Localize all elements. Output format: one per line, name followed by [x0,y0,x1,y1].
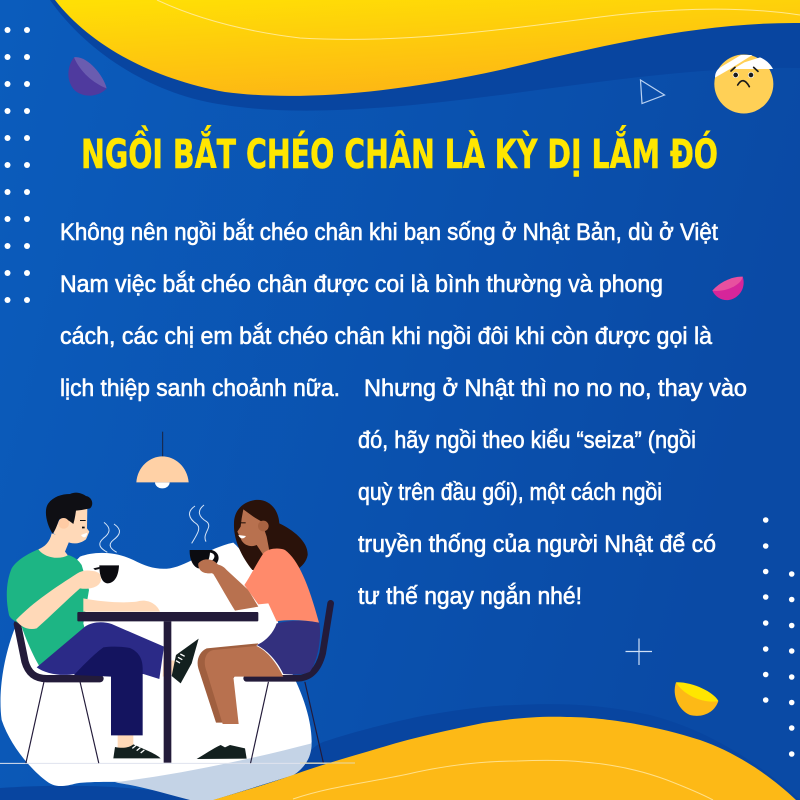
standing shoe [113,744,161,758]
shirt [7,549,89,667]
bottom wave highlight line [293,760,713,800]
face and neck [237,509,269,555]
dots left [4,27,30,303]
hand over cup [80,571,100,588]
woman [190,500,320,759]
thigh [37,622,164,679]
body text: quỳ trên đầu gối), một cách ngồi [358,479,662,506]
shoe stripes [132,745,144,753]
smile [238,535,246,538]
body text: Nam việc bắt chéo chân được coi là bình thường và phong [60,271,663,298]
top wave highlight line [157,0,800,39]
body text: tư thế ngay ngắn nhé! [358,583,582,610]
table [77,612,258,763]
bandage strip across [733,57,773,69]
blob shadow [115,743,312,800]
neck [38,533,70,558]
top yellow wave [55,0,800,96]
bottom left dark band [0,786,213,800]
arm [16,571,101,629]
cup [190,550,219,568]
hand [198,559,219,573]
right eye [748,72,754,78]
raised shoe [172,639,199,683]
floor line overlap [300,762,355,764]
eye [241,521,246,524]
skirt [257,621,320,675]
cup [93,565,119,583]
icon: pink bowl [712,277,744,300]
ear [258,521,269,531]
ear [58,518,69,529]
body text: đó, hãy ngồi theo kiểu “seiza” (ngồi [358,427,696,454]
body text: Không nên ngồi bắt chéo chân khi bạn sống ở Nhật Bản, dù ở Việt [60,219,718,246]
near leg [205,646,283,724]
dots right [763,517,794,757]
steam right [190,505,209,543]
pendant lamp [136,432,189,488]
forearm [203,564,258,611]
body text: truyền thống của người Nhật để có [358,531,716,558]
icon: purple bowl [68,57,107,96]
white blob backdrop [0,543,312,800]
bottom yellow wave [213,717,796,800]
top dark wave [50,0,800,111]
face [53,507,89,543]
bottom dark wave [293,704,800,800]
bandage strip rising [715,55,752,78]
icon: triangle outline [640,80,664,104]
smile [81,533,87,537]
shoe [197,745,247,759]
near forearm on table [83,598,160,612]
man [7,493,199,758]
body text [60,219,747,610]
eye [80,520,86,528]
illustration: couple at a cafe table [0,432,357,800]
shoe stripes [176,654,185,663]
icon: plus sign [626,638,652,665]
body text: cách, các chị em bắt chéo chân khi ngồi đôi khi còn được gọi là [60,323,713,350]
far leg foot [118,735,133,748]
steam left [100,522,119,552]
icon: bandaged sad face [714,54,773,113]
ankle [163,660,176,677]
body text: lịch thiệp sanh choảnh nữa. [60,375,340,402]
crossed-under leg [74,647,143,735]
hair [46,493,92,534]
shaded far leg [198,643,258,723]
man chair [17,624,100,763]
shirt [244,549,319,623]
left eye [733,72,738,78]
hair [234,500,308,570]
frown and brows [731,67,758,87]
body text: Nhưng ở Nhật thì no no no, thay vào [364,375,747,402]
floor line [0,762,357,765]
woman chair [247,603,331,763]
icon: yellow bowl [675,682,718,716]
